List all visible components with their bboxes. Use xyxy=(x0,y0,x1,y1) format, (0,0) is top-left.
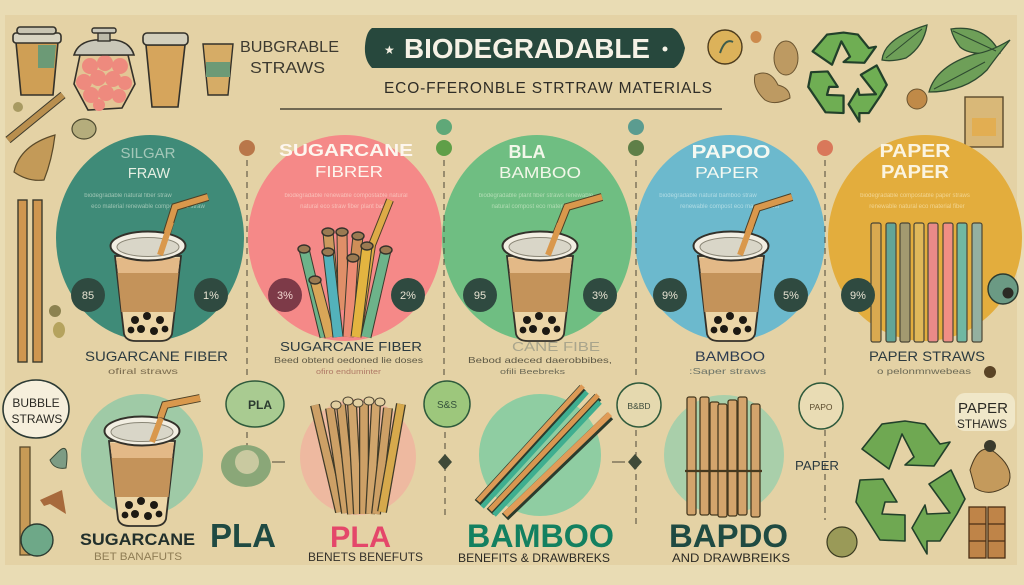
stat badge right xyxy=(583,278,617,312)
description text: natural eco straw fiber plant based xyxy=(300,204,392,210)
heading: BAMBOO xyxy=(499,165,581,182)
stat badge right: 2% xyxy=(400,290,416,302)
heading: bubble straws xyxy=(240,39,339,77)
description text: renewable natural eco material fiber xyxy=(869,204,965,210)
icon: small brown doodles xyxy=(750,31,927,109)
stat badge right: 5% xyxy=(783,290,799,302)
icon: small leaf bundle xyxy=(72,119,96,139)
stat badge right xyxy=(194,278,228,312)
stat badge right xyxy=(391,278,425,312)
icon: paper box xyxy=(965,97,1003,147)
column dividers with nodes xyxy=(239,119,833,525)
callout: bubble straws: BUBBLE xyxy=(12,396,60,410)
section: material column 1 xyxy=(56,135,244,376)
section: lower PLA xyxy=(221,381,470,564)
description text: biodegradable renewable compostable natural xyxy=(284,193,408,199)
section: lower sugarcane xyxy=(80,394,203,563)
panel circle: green xyxy=(442,135,632,341)
background circle xyxy=(664,395,784,515)
icon: diagonal straw xyxy=(8,95,63,140)
stat badge right xyxy=(774,278,808,312)
stat badge left: 85 xyxy=(82,290,94,302)
section: top-left bubble tea icons xyxy=(8,27,339,362)
panel circle: yellow xyxy=(828,135,1022,341)
icon: takeaway cup xyxy=(13,27,61,95)
icon: recycle symbol large xyxy=(856,421,965,554)
icon: two vertical straws xyxy=(18,200,42,362)
label: SUGARCANE xyxy=(80,530,195,549)
heading: PAPER xyxy=(881,162,949,182)
heading: BAMBOO xyxy=(467,518,614,554)
heading: BLA xyxy=(508,142,546,162)
icon: bamboo sticks xyxy=(685,397,762,517)
faded label: CANE FIBE xyxy=(512,339,600,354)
label: SUGARCANE FIBER xyxy=(280,339,422,354)
icon: colorful straw bundle xyxy=(298,200,392,337)
icon: straw and cup xyxy=(502,197,602,341)
icon: small seed dots xyxy=(13,102,65,338)
icon: tapioca jar xyxy=(74,28,135,111)
description text xyxy=(479,193,594,210)
heading: PLA xyxy=(330,521,391,554)
badge: B&BD xyxy=(627,401,651,411)
stat badge left: 95 xyxy=(474,290,486,302)
heading: FRAW xyxy=(128,166,170,182)
icon: straw and cup xyxy=(694,197,792,341)
icon: wooden panel xyxy=(969,507,1005,558)
icon: seed pod xyxy=(988,274,1018,304)
heading: PLA dark: PLA xyxy=(210,517,276,554)
callout: bubble straws xyxy=(3,380,69,438)
description text: biodegradable plant fiber straws renewable xyxy=(479,193,594,199)
label: paper: PAPER xyxy=(795,459,839,473)
heading: SUGARCANE xyxy=(279,140,413,160)
icon: small cup xyxy=(203,44,233,95)
heading: PAPOO xyxy=(692,142,770,162)
stat badge left: 3% xyxy=(277,290,293,302)
heading: bubble straws: BUBGRABLE xyxy=(240,39,339,56)
section: material column 4 xyxy=(635,135,825,376)
badge xyxy=(799,383,843,429)
description text: biodegradable natural bamboo straw xyxy=(659,193,757,199)
badge: PAPO xyxy=(810,402,833,412)
icon: faded recycle xyxy=(221,445,271,487)
callout: paper straws: STHAWS xyxy=(957,417,1007,431)
icon: recycle symbol top xyxy=(808,33,887,122)
caption: Bebod adeced daerobbibes, xyxy=(468,355,612,365)
stat badge left xyxy=(463,278,497,312)
heading: bubble straws: STRAWS xyxy=(250,60,325,77)
description text: eco material renewable compostable straw xyxy=(91,204,206,210)
title banner: ★ xyxy=(384,43,395,57)
stat badge right: 1% xyxy=(203,290,219,302)
description text: renewable compost eco material fiber xyxy=(680,204,780,210)
icon: left bamboo stalk xyxy=(20,447,67,556)
icon: straw and cup xyxy=(110,197,208,341)
icon: straw bundle xyxy=(315,397,401,514)
heading: PAPER xyxy=(880,141,950,161)
description text xyxy=(659,193,780,210)
caption: ofiro enduminter xyxy=(316,367,382,376)
title banner xyxy=(365,28,685,68)
icon: right doodles xyxy=(827,366,1010,557)
icon: leaves xyxy=(882,25,1010,92)
heading: PAPER xyxy=(695,165,759,182)
section: material column 5 xyxy=(828,135,1022,376)
description text: biodegradable natural fiber straw xyxy=(84,193,172,199)
background circle xyxy=(479,394,601,516)
section: material column 3 xyxy=(442,135,632,376)
panel circle: teal xyxy=(56,135,244,341)
description text: natural compost eco material xyxy=(491,204,569,210)
callout: paper straws: PAPER xyxy=(958,400,1008,417)
caption: BENEFITS & DRAWBREKS xyxy=(458,551,610,565)
stat badge right: 3% xyxy=(592,290,608,302)
caption: ofiral straws xyxy=(108,367,178,376)
stat badge left xyxy=(653,278,687,312)
heading xyxy=(120,145,176,182)
icon: tall cup xyxy=(143,33,188,107)
stat badge left: 9% xyxy=(662,290,678,302)
section: lower bamboo vertical xyxy=(664,383,843,565)
heading xyxy=(499,142,581,182)
caption: Beed obtend oedoned lie doses xyxy=(274,355,423,365)
section: material column 2 xyxy=(248,135,442,376)
label: BAMBOO xyxy=(695,348,765,364)
label: PAPER STRAWS xyxy=(869,348,985,364)
icon: coin badge xyxy=(708,30,742,64)
icon: row of paper straws xyxy=(871,223,982,342)
heading: BAPDO xyxy=(669,518,788,554)
caption xyxy=(468,355,612,376)
caption: AND DRAWBREIKS xyxy=(672,551,790,565)
stat badge: 9% xyxy=(850,290,866,302)
heading: FIBRER xyxy=(315,164,383,181)
badge: small: S&S xyxy=(437,400,457,411)
callout: bubble straws: STRAWS xyxy=(12,412,62,426)
callout: paper straws xyxy=(955,393,1015,431)
caption: ofili Beebreks xyxy=(500,367,565,376)
heading xyxy=(279,140,413,181)
icon: lower cup xyxy=(104,398,200,526)
heading xyxy=(880,141,950,182)
panel circle: pink xyxy=(248,135,442,341)
stat badge xyxy=(841,278,875,312)
description text xyxy=(284,193,408,210)
caption: BENETS BENEFUTS xyxy=(308,550,423,564)
caption: :Saper straws xyxy=(689,366,766,376)
icon: husk leaf xyxy=(14,135,55,180)
stat badge left xyxy=(268,278,302,312)
background circle xyxy=(81,394,203,516)
section: lower bamboo diagonal xyxy=(458,383,661,565)
label: SUGARCANE FIBER xyxy=(85,348,228,364)
description text xyxy=(860,193,970,210)
caption: o pelonmnwebeas xyxy=(877,367,971,376)
panel circle: blue xyxy=(635,135,825,341)
heading: SILGAR xyxy=(120,145,176,162)
icon: diagonal straws xyxy=(478,386,610,517)
badge: PLA xyxy=(226,381,284,427)
stat badge left xyxy=(71,278,105,312)
heading xyxy=(692,142,770,182)
description text xyxy=(84,193,206,210)
background circle xyxy=(300,399,416,515)
description text: biodegradable compostable paper straws xyxy=(860,193,970,199)
caption: BET BANAFUTS xyxy=(94,551,182,563)
caption xyxy=(274,355,423,376)
title banner: BIODEGRADABLE xyxy=(404,33,650,64)
subtitle: ECO-FFERONBLE STRTRAW MATERIALS xyxy=(384,80,712,97)
badge: small xyxy=(424,381,470,427)
badge xyxy=(617,383,661,427)
badge: PLA: PLA xyxy=(248,398,272,412)
